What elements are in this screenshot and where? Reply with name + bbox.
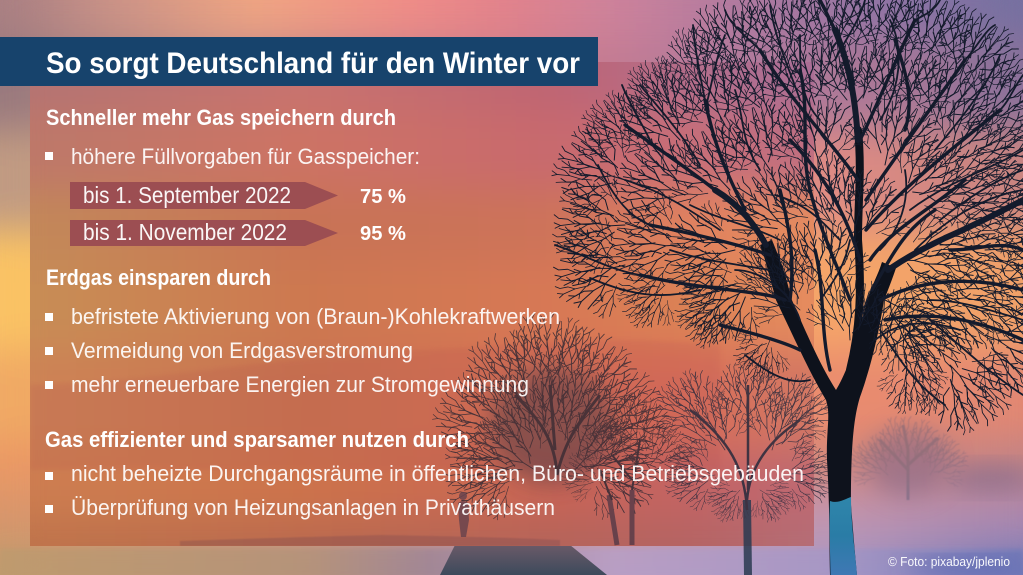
arrow: bis 1. September 2022: bis 1. September 2022	[83, 182, 291, 208]
bullet item: höhere Füllvorgaben für Gasspeicher:	[71, 144, 420, 169]
central stem	[850, 130, 860, 370]
large tree in the foreground	[536, 0, 1023, 575]
painted trunk base	[830, 497, 857, 575]
title bar	[0, 37, 598, 86]
section 3: Gas effizienter nutzen	[45, 427, 804, 520]
limbs	[715, 30, 1023, 270]
distant hill	[34, 388, 76, 444]
fine twigs	[536, 0, 1023, 455]
heading: Gas effizienter und sparsamer nutzen durch	[45, 427, 469, 452]
small roadside trees	[415, 311, 851, 575]
blue ground at lower right	[907, 559, 1023, 575]
title: So sorgt Deutschland für den Winter vor	[46, 47, 580, 80]
bullet item: Überprüfung von Heizungsanlagen in Privathäusern	[71, 495, 555, 520]
photo credit: © Foto: pixabay/jplenio	[888, 554, 1010, 569]
section 1: Gas speichern	[45, 105, 420, 246]
distant hazy tree	[835, 416, 1023, 500]
bullet item: nicht beheizte Durchgangsräume in öffentlichen, Büro- und Betriebsgebäuden	[71, 461, 804, 486]
bullet item: Vermeidung von Erdgasverstromung	[71, 338, 413, 363]
section 2: Erdgas einsparen	[45, 265, 560, 397]
arrow: bis 1. November 2022: bis 1. November 2022	[83, 219, 287, 245]
trunk	[760, 240, 896, 575]
snowy ground	[0, 549, 1023, 575]
heading: Erdgas einsparen durch	[46, 265, 271, 290]
bullet item: mehr erneuerbare Energien zur Stromgewinnung	[71, 372, 529, 397]
panel: translucent content background	[30, 62, 814, 546]
horizon tree line	[180, 535, 560, 546]
value: 95 %: 95 %	[360, 223, 406, 245]
value: 75 %: 75 %	[360, 186, 406, 208]
road	[440, 545, 607, 575]
person on the road	[458, 492, 469, 537]
heading: Schneller mehr Gas speichern durch	[46, 105, 396, 130]
bullet item: befristete Aktivierung von (Braun-)Kohlekraftwerken	[71, 304, 560, 329]
